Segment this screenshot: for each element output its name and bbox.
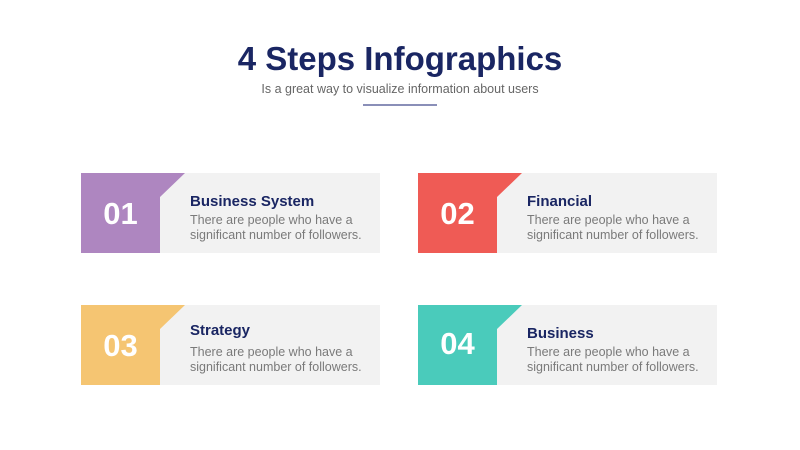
card 04: significant number of followers. bbox=[527, 360, 699, 374]
card 04: 04 bbox=[440, 326, 475, 361]
title: 4 Steps Infographics bbox=[238, 40, 562, 77]
card 02: There are people who have a bbox=[527, 213, 690, 227]
card 03: There are people who have a bbox=[190, 345, 353, 359]
card 03 bbox=[81, 305, 380, 385]
subtitle: Is a great way to visualize information about users bbox=[261, 82, 539, 96]
card 01 bbox=[81, 173, 380, 253]
card 02: significant number of followers. bbox=[527, 228, 699, 242]
card 03: significant number of followers. bbox=[190, 360, 362, 374]
card 01: Business System bbox=[190, 193, 314, 210]
card 01: There are people who have a bbox=[190, 213, 353, 227]
card 01: 01 bbox=[103, 196, 138, 231]
card 02 bbox=[418, 173, 717, 253]
card 03: 03 bbox=[103, 328, 138, 363]
card 04 bbox=[418, 305, 717, 385]
card 01: significant number of followers. bbox=[190, 228, 362, 242]
card 04: Business bbox=[527, 325, 594, 342]
card 02: Financial bbox=[527, 193, 592, 210]
card 02: 02 bbox=[440, 196, 475, 231]
underline bbox=[363, 104, 437, 106]
card 03: Strategy bbox=[190, 322, 250, 339]
card 04: There are people who have a bbox=[527, 345, 690, 359]
